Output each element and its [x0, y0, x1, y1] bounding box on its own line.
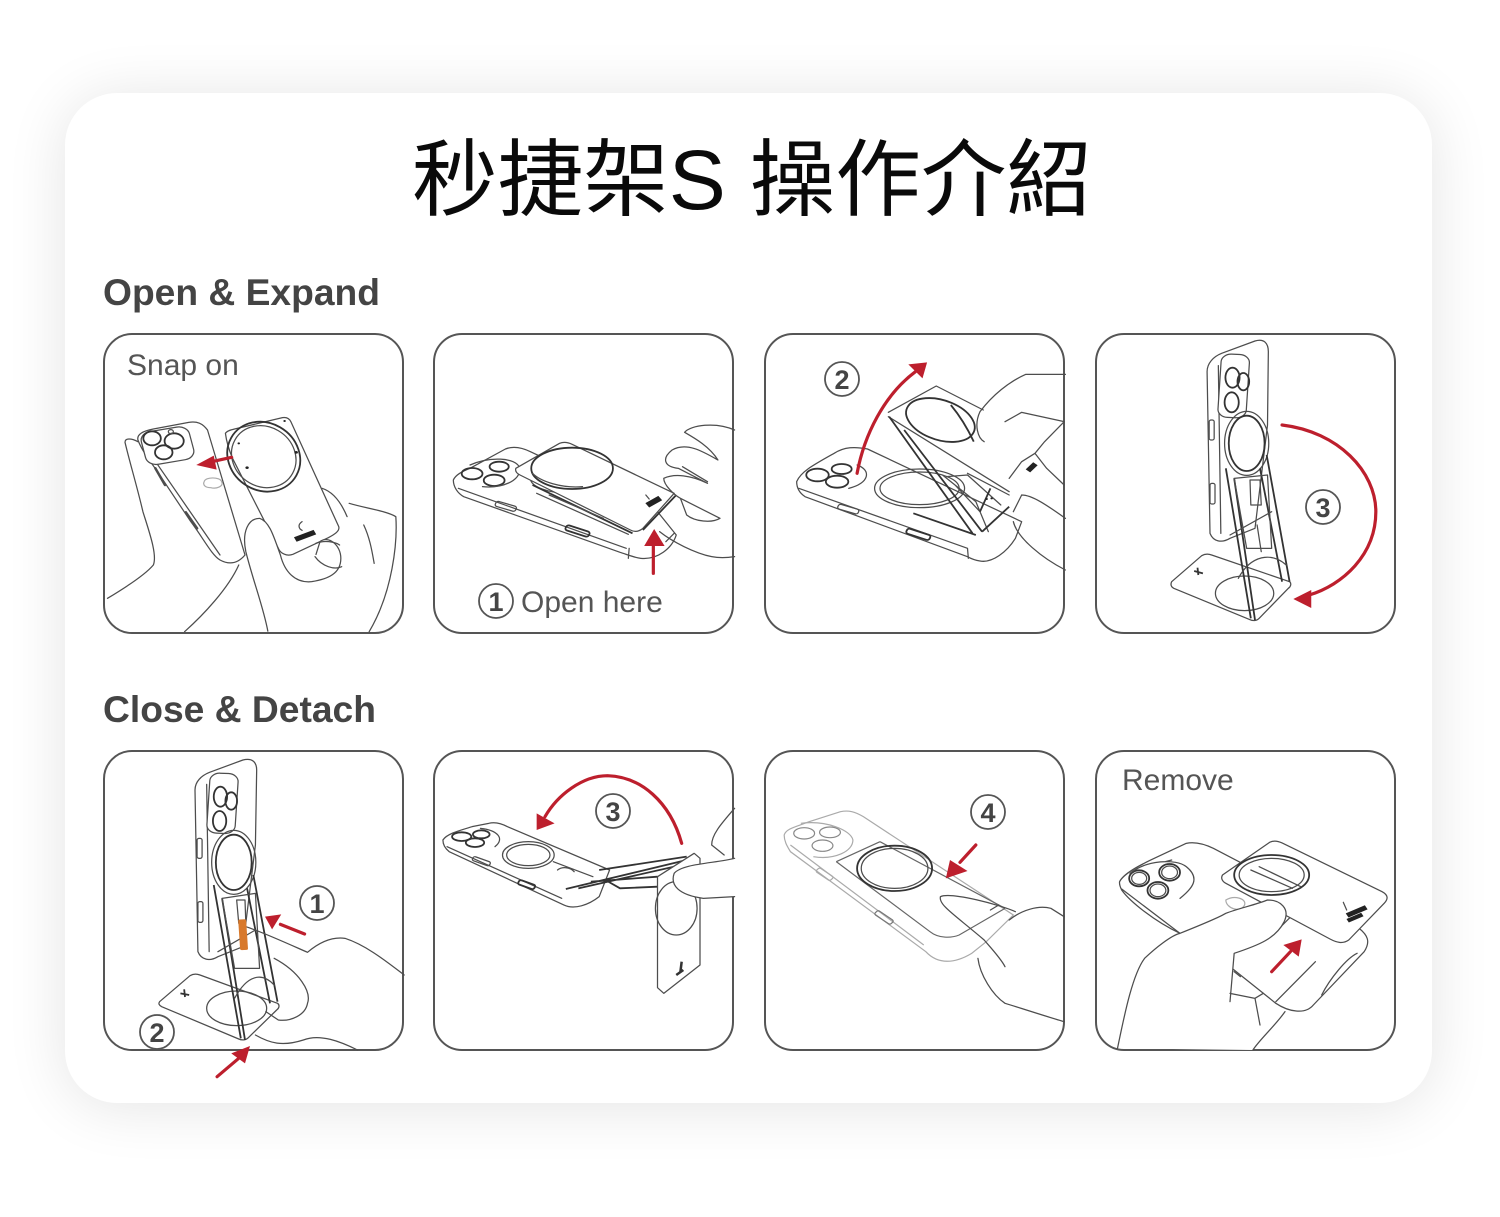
- number badge 2: [140, 1015, 174, 1049]
- white card with soft shadow: [65, 93, 1432, 1103]
- panel: fold stand: [434, 751, 735, 1050]
- number badge 2: 2: [149, 1018, 165, 1048]
- illustration: stand lifted from phone: [797, 362, 1065, 570]
- number badge 1: [300, 886, 334, 920]
- illustration: pressing closed stand flat: [784, 811, 1064, 1022]
- illustration: folding stand back to phone: [443, 776, 735, 993]
- number badge 4: 4: [980, 798, 996, 828]
- number badge 4: [971, 795, 1005, 829]
- panel: stand unfolded: [1096, 334, 1395, 633]
- panel: open here: [434, 334, 735, 633]
- panel: snap on: [104, 334, 403, 633]
- number badge 3: [596, 794, 630, 828]
- illustration: phone held in hand with stand plate: [108, 415, 396, 632]
- number badge 1: 1: [488, 587, 504, 617]
- number badge 1: 1: [309, 889, 325, 919]
- label: Remove: Remove: [1122, 764, 1234, 797]
- number badge 3: 3: [605, 797, 621, 827]
- title: 秒捷架S 操作介紹: [412, 133, 1092, 227]
- illustration: pressing the stand latch: [159, 759, 404, 1077]
- panel: press flat: [765, 751, 1064, 1050]
- number badge 2: [825, 362, 859, 396]
- illustration: removing the stand from the phone: [1118, 841, 1387, 1050]
- number badge 3: [1306, 490, 1340, 524]
- number badge 2: 2: [834, 365, 850, 395]
- number badge 3: 3: [1315, 493, 1331, 523]
- panel: press to close: [104, 751, 404, 1077]
- panel: lift stand: [765, 334, 1065, 633]
- illustration: phone on stand: [1171, 340, 1376, 621]
- label: Snap on: Snap on: [127, 349, 239, 382]
- illustration: phone with plate being opened: [453, 425, 735, 573]
- number badge 1: [479, 584, 513, 618]
- heading: Close & Detach: Close & Detach: [103, 689, 376, 730]
- panel: remove: [1096, 751, 1395, 1050]
- label: Open here: Open here: [521, 586, 663, 619]
- heading: Open & Expand: Open & Expand: [103, 272, 380, 313]
